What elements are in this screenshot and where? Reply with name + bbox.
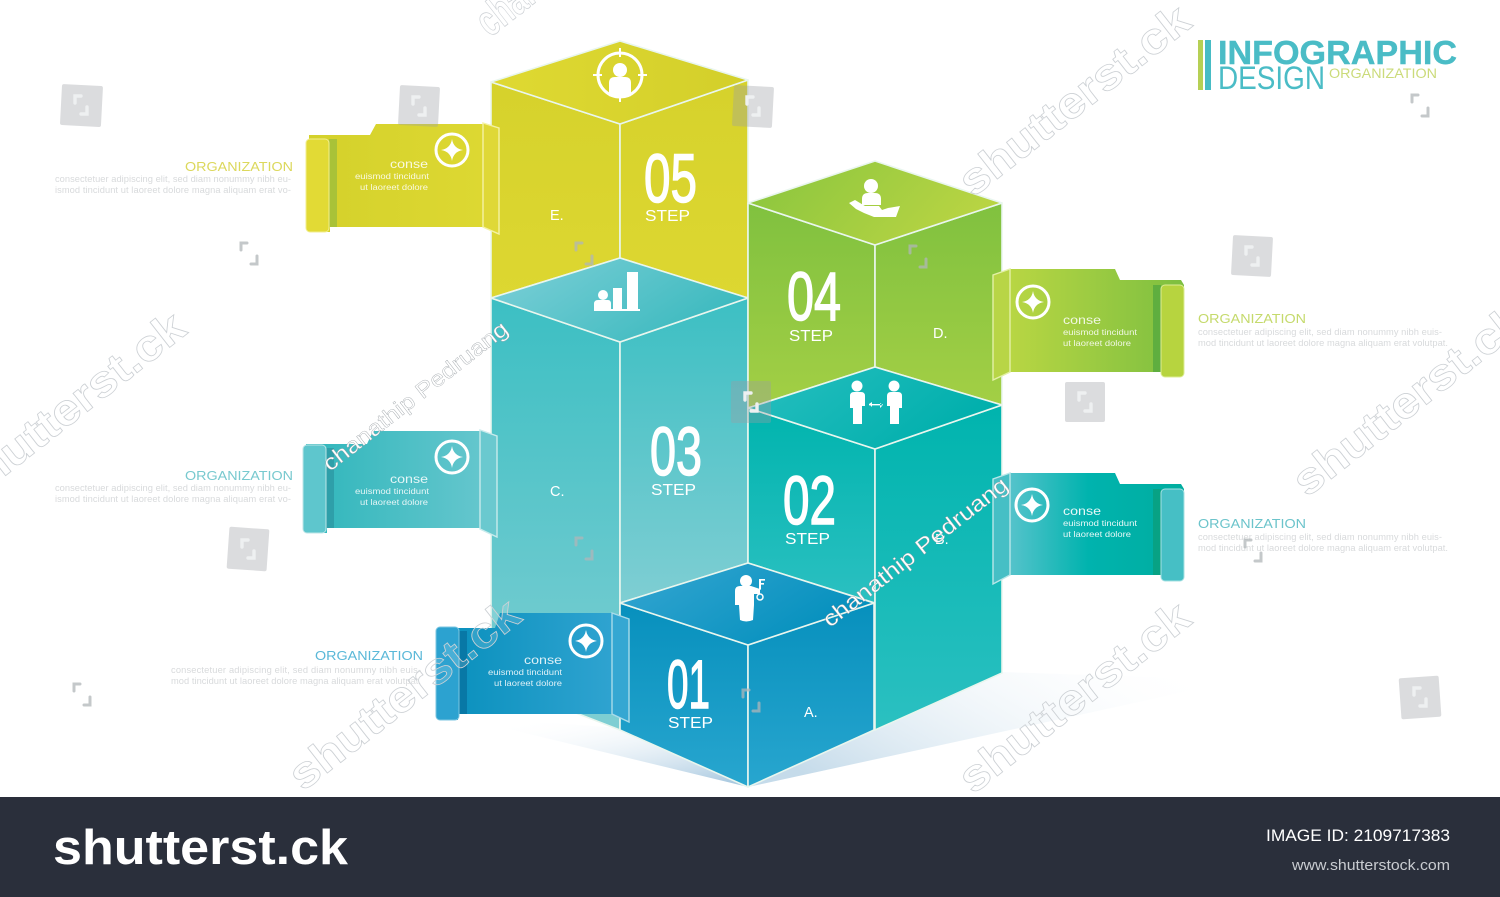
watermark: shutterstock outlines: shutterst.ck xyxy=(949,0,1200,206)
column: step 04 xyxy=(748,161,1002,408)
image id: IMAGE ID: 2109717383 xyxy=(1266,827,1450,845)
flap xyxy=(612,613,629,722)
caption: ut laoreet dolore xyxy=(1063,338,1131,348)
caption xyxy=(488,655,563,688)
watermark: shutterstock outlines: shutterst.ck xyxy=(949,592,1200,803)
folder tab: A (blue) xyxy=(436,613,629,722)
caption xyxy=(1063,315,1138,348)
column: step 02 xyxy=(748,367,1002,730)
caption: conse xyxy=(390,474,428,486)
text block: organization A: ORGANIZATION xyxy=(315,648,423,663)
label: step: STEP xyxy=(785,531,830,548)
text block: organization A: consectetuer adipiscing elit, sed diam nonummy nibh euis- xyxy=(171,665,421,675)
text block: organization D: mod tincidunt ut laoreet dolore magna aliquam erat volutpat. xyxy=(1198,338,1448,348)
column: step 03 xyxy=(491,258,748,730)
rolled end xyxy=(303,445,326,533)
watermark: author name: chanathip Pedruang xyxy=(818,472,1013,632)
icon: plus badge xyxy=(1016,489,1048,521)
caption: conse xyxy=(524,655,562,667)
folder tab: E (yellow) xyxy=(306,123,499,234)
footer logo: shutterst.ck xyxy=(53,821,349,875)
label: step: STEP xyxy=(789,328,833,345)
number 03: 03 xyxy=(650,413,702,490)
text block: organization C: ismod tincidunt ut laoreet dolore magna aliquam erat vo- xyxy=(55,494,291,504)
text block: organization A: mod tincidunt ut laoreet dolore magna aliquam erat volutpat. xyxy=(171,676,421,686)
caption: euismod tincidunt xyxy=(355,171,430,181)
site url: www.shutterstock.com xyxy=(1291,858,1450,874)
text block: organization B: ORGANIZATION xyxy=(1198,516,1306,531)
caption: conse xyxy=(1063,315,1101,327)
letter B: B. xyxy=(935,532,949,548)
text block: organization C: consectetuer adipiscing elit, sed diam nonummy nibh eu- xyxy=(55,483,291,493)
text block: organization E: ismod tincidunt ut laoreet dolore magna aliquam erat vo- xyxy=(55,185,291,195)
label: step: STEP xyxy=(645,208,690,225)
footer band xyxy=(0,797,1500,897)
flap xyxy=(993,269,1010,380)
number 02: 02 xyxy=(783,462,836,539)
letter A: A. xyxy=(804,705,818,721)
number 05: 05 xyxy=(644,140,697,217)
logo title: DESIGN xyxy=(1218,60,1325,96)
caption: ut laoreet dolore xyxy=(360,182,428,192)
logo title xyxy=(1198,34,1457,96)
text block: organization C xyxy=(55,468,293,504)
icon: person with bars xyxy=(594,272,640,311)
text block: organization E xyxy=(55,159,293,195)
text block: organization E: consectetuer adipiscing elit, sed diam nonummy nibh eu- xyxy=(55,174,291,184)
rolled end xyxy=(436,627,459,720)
folder tab: C (teal) xyxy=(303,430,497,537)
caption: conse xyxy=(1063,506,1101,518)
label: step: STEP xyxy=(668,715,713,732)
letter C: C. xyxy=(550,484,564,500)
text block: organization B: consectetuer adipiscing elit, sed diam nonummy nibh euis- xyxy=(1198,532,1442,542)
icon: plus badge xyxy=(570,625,602,657)
column: step 01 xyxy=(620,563,874,787)
icon: plus badge xyxy=(1017,286,1049,318)
caption xyxy=(355,474,430,507)
folder tab: B (sea green) xyxy=(993,473,1184,584)
number 04: 04 xyxy=(787,258,841,335)
text block: organization D: ORGANIZATION xyxy=(1198,311,1306,326)
icon: plus badge xyxy=(436,441,468,473)
rolled end xyxy=(1161,489,1184,581)
label: step: STEP xyxy=(651,482,696,499)
text block: organization B: mod tincidunt ut laoreet dolore magna aliquam erat volutpat. xyxy=(1198,543,1448,553)
flap xyxy=(483,123,499,234)
caption: euismod tincidunt xyxy=(1063,518,1138,528)
caption: euismod tincidunt xyxy=(1063,327,1138,337)
text block: organization E: ORGANIZATION xyxy=(185,159,293,174)
rolled end xyxy=(1161,285,1184,377)
flap xyxy=(993,473,1010,584)
logo title: INFOGRAPHIC xyxy=(1218,34,1457,71)
letter D: D. xyxy=(933,326,948,342)
watermark: author name xyxy=(318,316,1013,632)
text block: organization D: consectetuer adipiscing elit, sed diam nonummy nibh euis- xyxy=(1198,327,1442,337)
watermark: shutterstock outlines: shutterst.ck xyxy=(279,589,530,800)
text block: organization A xyxy=(171,648,423,686)
column: step 05 xyxy=(491,41,748,298)
watermark tiles xyxy=(60,84,1441,719)
icon: target person xyxy=(593,48,647,102)
letter E: E. xyxy=(550,208,564,224)
text block: organization B xyxy=(1198,516,1448,553)
folder tab: D (green) xyxy=(993,269,1184,380)
caption: ut laoreet dolore xyxy=(360,497,428,507)
rolled end xyxy=(306,139,329,232)
number 01: 01 xyxy=(667,646,710,723)
caption xyxy=(355,159,430,192)
icon: plus badge xyxy=(436,134,468,166)
caption: ut laoreet dolore xyxy=(1063,529,1131,539)
flap xyxy=(480,430,497,537)
caption: ut laoreet dolore xyxy=(494,678,562,688)
caption: conse xyxy=(390,159,428,171)
icon: two people exchanging xyxy=(850,380,902,424)
floor shadow xyxy=(455,672,1240,787)
caption: euismod tincidunt xyxy=(355,486,430,496)
caption xyxy=(1063,506,1138,539)
logo title: ORGANIZATION xyxy=(1329,66,1437,81)
icon: person with key xyxy=(735,575,765,622)
text block: organization C: ORGANIZATION xyxy=(185,468,293,483)
watermark: author name: chanathip Pedruang xyxy=(318,316,513,476)
caption: euismod tincidunt xyxy=(488,667,563,677)
icon: hand holding person xyxy=(849,179,900,217)
text block: organization D xyxy=(1198,311,1448,348)
